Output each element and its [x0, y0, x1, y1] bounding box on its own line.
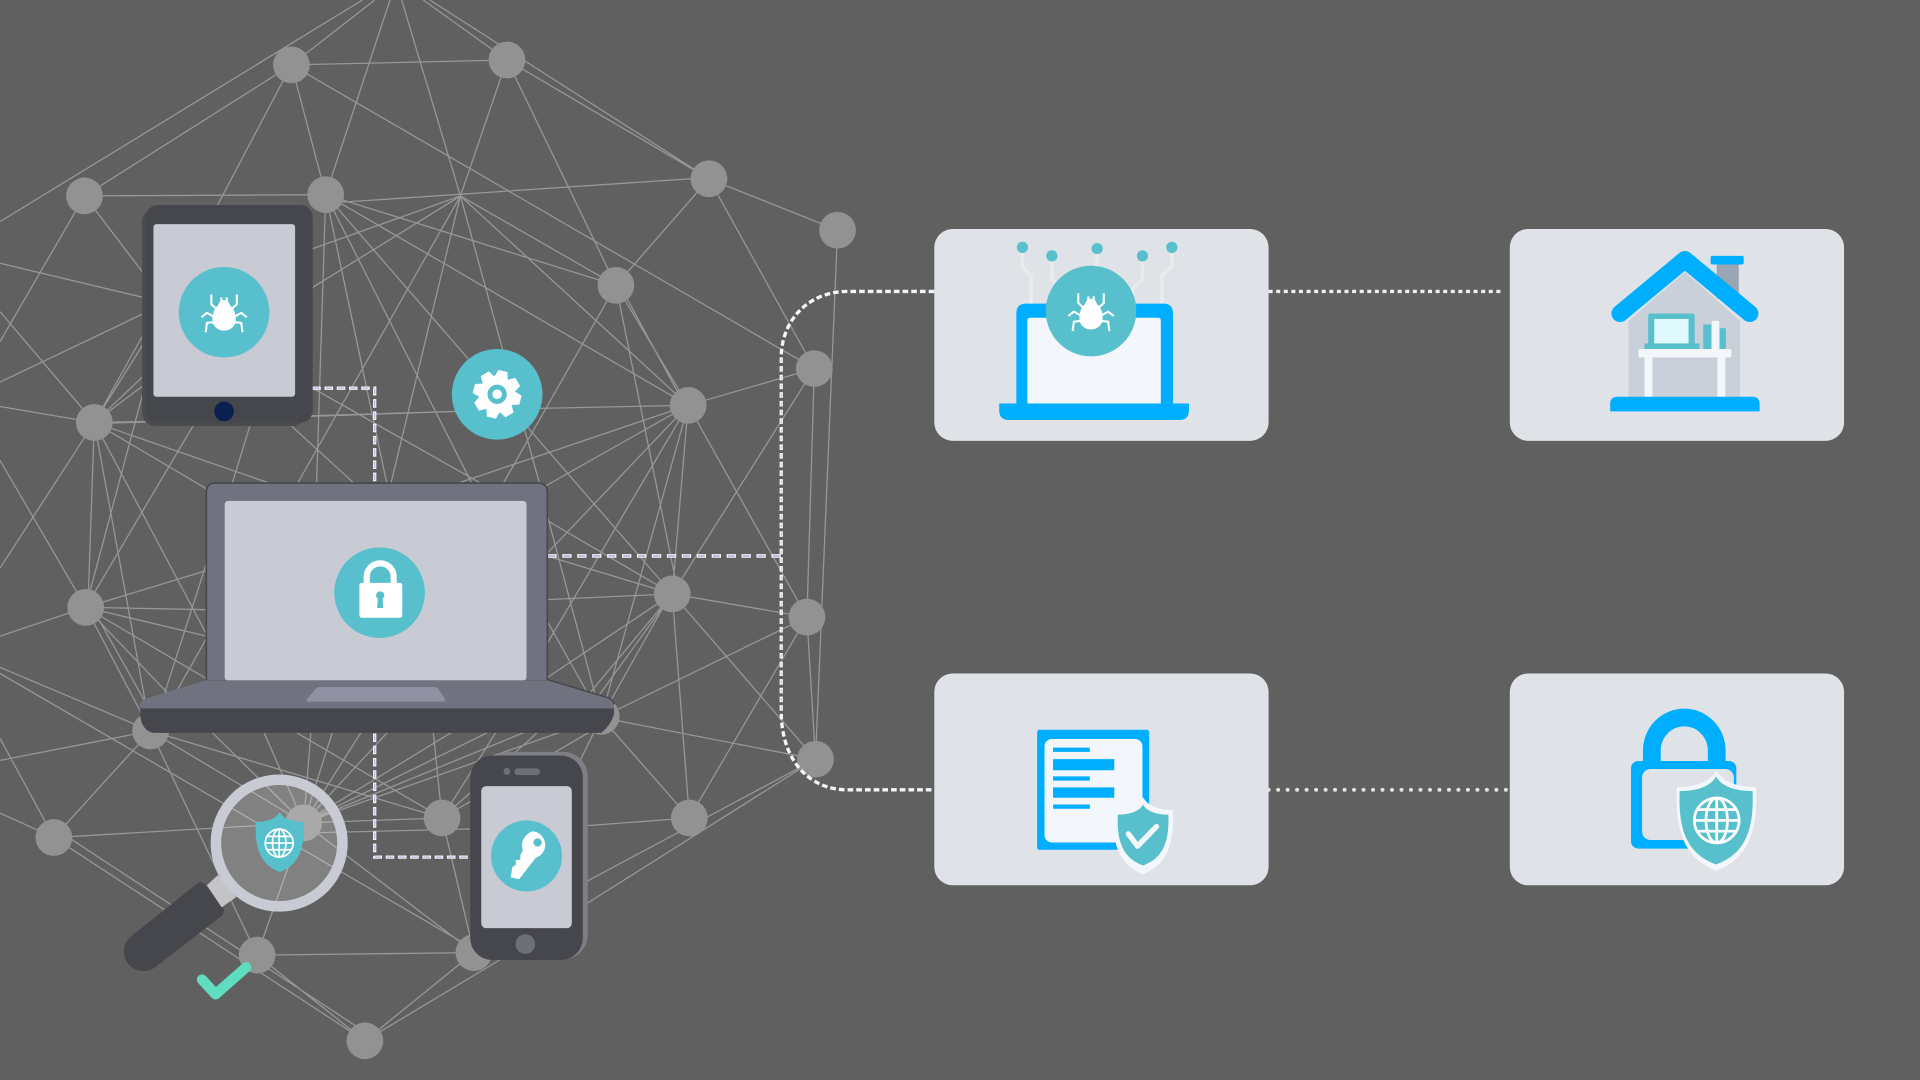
tablet home button — [214, 402, 234, 421]
panel: document shield card — [934, 673, 1269, 885]
house base — [1610, 397, 1760, 411]
desk laptop — [1644, 313, 1700, 349]
dotted connector: bottom cards — [1269, 788, 1510, 791]
laptop with lock icon — [140, 483, 614, 733]
padlock — [1631, 718, 1736, 849]
panel: secure lock card — [1510, 673, 1844, 885]
laptop front edge — [140, 708, 614, 733]
laptop screen — [225, 501, 527, 681]
smartphone with key icon — [470, 752, 588, 960]
laptop trackpad — [307, 687, 445, 702]
roof — [1620, 260, 1750, 313]
network nodes — [36, 42, 856, 1059]
icon: bug badge — [1046, 266, 1136, 356]
dashed connector to cards — [781, 291, 934, 790]
house walls — [1629, 272, 1740, 399]
dashed connectors between devices — [312, 388, 781, 857]
desk — [1638, 349, 1731, 398]
circuit dots — [1017, 242, 1177, 262]
books — [1703, 321, 1726, 349]
dotted connector: top cards — [1269, 290, 1502, 293]
panel: infected laptop card — [934, 229, 1269, 441]
icon: bug badge — [179, 267, 269, 358]
panel: home office card — [1510, 229, 1844, 441]
phone speaker — [504, 768, 540, 775]
magnifier ring — [216, 780, 342, 906]
icon: globe shield — [1677, 770, 1756, 871]
blue laptop — [999, 304, 1189, 420]
tablet screen — [153, 224, 295, 397]
magnifying glass — [124, 780, 342, 971]
check mark — [202, 967, 246, 994]
magnifier lens — [219, 783, 339, 903]
magnifier handle — [124, 882, 224, 971]
magnifier neck — [207, 875, 236, 907]
icon: key badge — [491, 820, 562, 891]
network mesh lines — [0, 0, 838, 1041]
tablet with bug icon — [142, 205, 313, 426]
icon: globe shield — [256, 812, 304, 872]
icon: gear badge — [452, 349, 542, 440]
icon: lock badge — [334, 547, 425, 638]
phone screen — [481, 786, 572, 928]
phone home button — [516, 934, 535, 954]
laptop keyboard deck — [140, 680, 614, 709]
circuit traces — [1022, 252, 1172, 306]
laptop lid — [206, 483, 547, 681]
icon: check shield — [1113, 797, 1173, 874]
document — [1037, 730, 1149, 850]
chimney — [1711, 256, 1744, 299]
